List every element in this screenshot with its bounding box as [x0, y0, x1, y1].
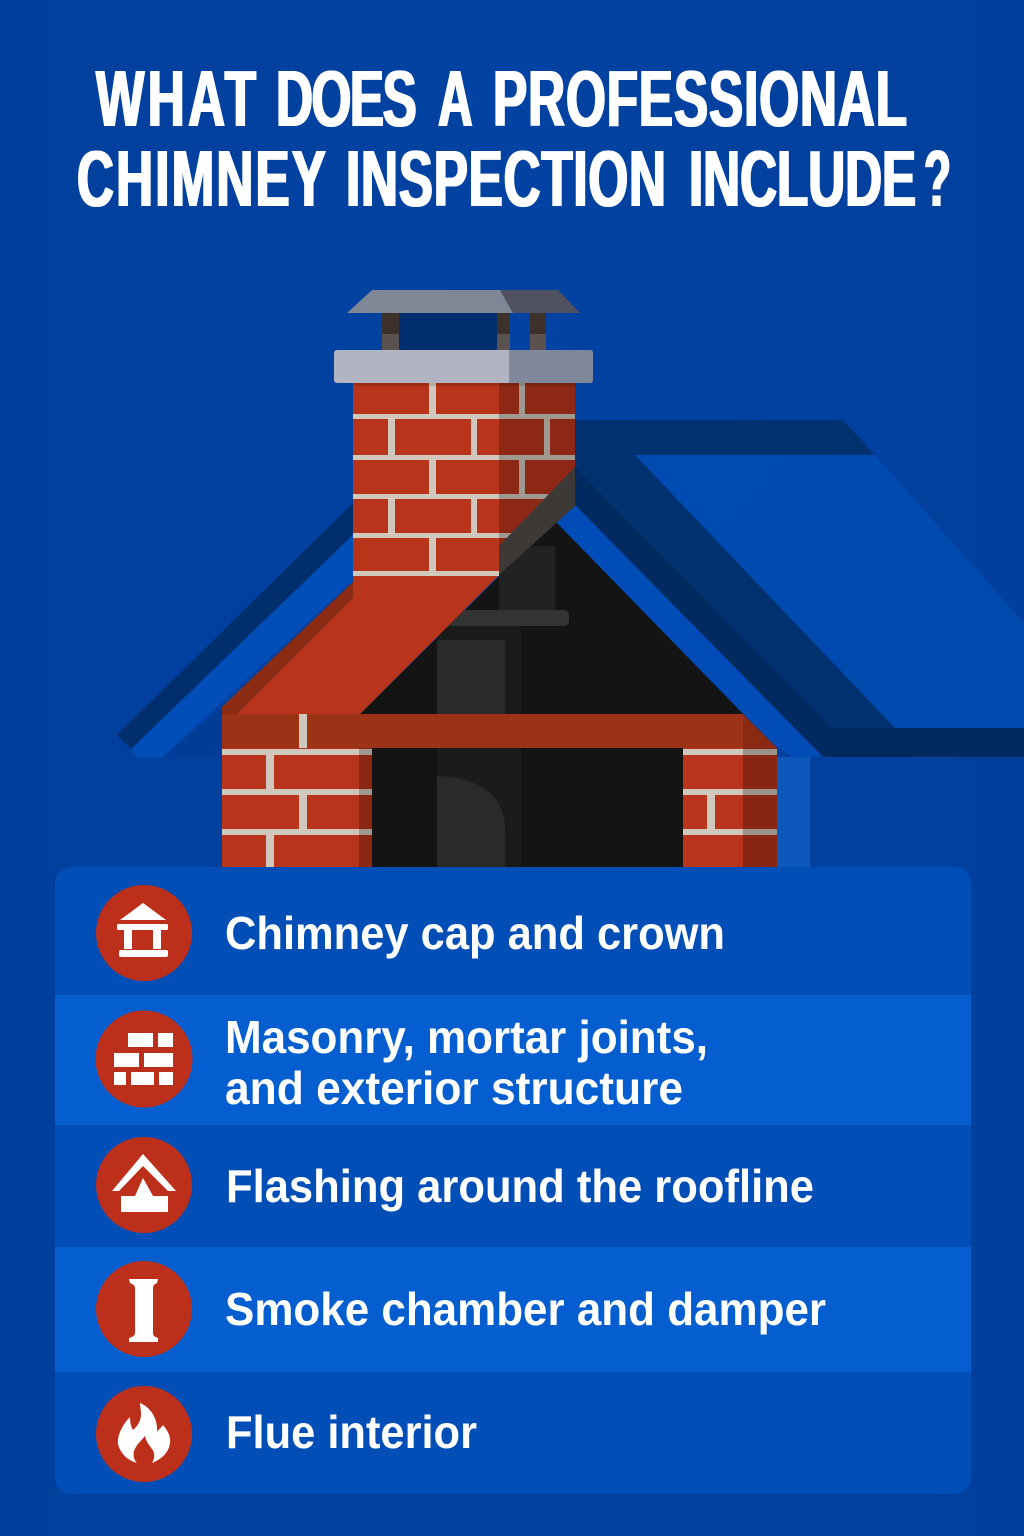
- left roof: [117, 503, 353, 757]
- title: CHIMNEY: [77, 135, 326, 224]
- chimney crown: [334, 350, 593, 383]
- item: smoke chamber: [96, 1261, 826, 1357]
- chimney bricks: [353, 383, 575, 576]
- item: masonry: and exterior structure: [225, 1062, 683, 1114]
- item: smoke chamber: Smoke chamber and damper: [225, 1283, 826, 1335]
- title: ?: [924, 134, 951, 223]
- brick band: [222, 714, 777, 748]
- icon: flame: [96, 1386, 192, 1482]
- item: flue interior: [96, 1386, 477, 1482]
- attic interior: [360, 521, 743, 714]
- item: masonry: [96, 1010, 708, 1114]
- lower right brick wall: [683, 748, 777, 867]
- red slope: [222, 575, 499, 728]
- item: flashing: [96, 1137, 814, 1233]
- item: flue interior: Flue interior: [226, 1406, 477, 1458]
- title: INCLUDE: [689, 135, 916, 224]
- chimney cap: [347, 290, 580, 350]
- icon: roof flashing: [96, 1137, 192, 1233]
- item: chimney cap and crown: [96, 885, 725, 981]
- item: chimney cap and crown: Chimney cap and crown: [225, 907, 725, 959]
- step flashing: [499, 467, 575, 575]
- house and chimney illustration: [117, 290, 1024, 867]
- title: WHAT: [96, 55, 256, 144]
- icon: cap and crown: [96, 885, 192, 981]
- item: masonry: Masonry, mortar joints,: [225, 1011, 708, 1063]
- fireplace opening: [372, 748, 683, 867]
- icon: damper: [96, 1261, 192, 1357]
- title: A: [438, 53, 473, 143]
- icon: bricks: [96, 1010, 192, 1108]
- title: INSPECTION: [346, 135, 666, 224]
- lower left brick wall: [222, 748, 372, 867]
- checklist panel: [55, 867, 971, 1494]
- item: flashing: Flashing around the roofline: [226, 1160, 814, 1212]
- right roof: [555, 420, 1024, 867]
- title: [77, 53, 951, 224]
- title: PROFESSIONAL: [493, 55, 907, 144]
- title: DOES: [276, 55, 417, 144]
